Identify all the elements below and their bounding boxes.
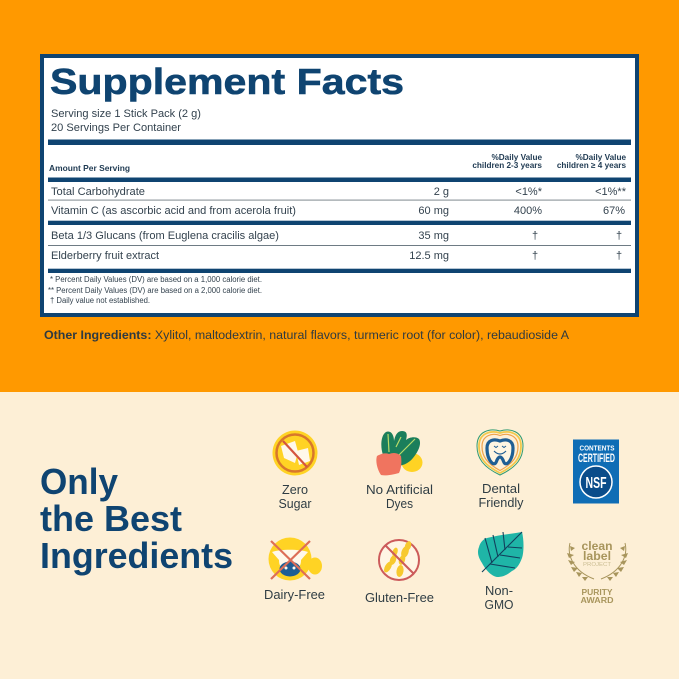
label: no artificial dyes: Dyes <box>386 496 413 511</box>
label: dental friendly: Friendly <box>478 495 524 510</box>
row: elderberry: † <box>532 250 538 262</box>
label: dental friendly: Dental <box>482 481 520 496</box>
icon: clean label project purity award: PURITY <box>582 588 613 597</box>
footnotes: * Percent Daily Values (DV) are based on a 1,000 calorie diet. <box>50 275 262 284</box>
row: beta glucans: Beta 1/3 Glucans (from Euglena cracilis algae) <box>51 230 279 242</box>
table header: children 2-3 years <box>472 161 542 170</box>
row: elderberry: Elderberry fruit extract <box>51 250 159 262</box>
row: vitamin C: 67% <box>603 205 625 217</box>
table header: %Daily Value <box>575 153 626 162</box>
icon: clean label project purity award <box>567 541 628 605</box>
row: total carbohydrate: Total Carbohydrate <box>51 186 145 198</box>
label: zero sugar: Sugar <box>278 496 312 511</box>
icon: clean label project purity award: clean <box>582 541 612 553</box>
label: non-GMO: Non- <box>485 583 513 598</box>
other ingredients: Other Ingredients: Xylitol, maltodextrin, natural flavors, turmeric root (for color), rebaudioside A <box>44 328 570 342</box>
row: total carbohydrate: 2 g <box>434 186 449 198</box>
icon: NSF contents certified badge: CERTIFIED <box>578 453 615 465</box>
icon: zero sugar <box>272 430 318 476</box>
table header <box>49 153 626 173</box>
row: elderberry: † <box>616 250 622 262</box>
heading: Only the Best Ingredients <box>40 461 233 576</box>
icon: dairy-free <box>268 538 322 580</box>
footnotes: † Daily value not established. <box>50 296 150 305</box>
icon: NSF contents certified badge: NSF <box>586 475 607 492</box>
row: beta glucans: † <box>616 230 622 242</box>
row: total carbohydrate: <1%** <box>595 186 627 198</box>
icon: NSF contents certified badge <box>573 440 619 504</box>
icon: clean label project purity award: label <box>583 551 611 563</box>
table header: children ≥ 4 years <box>557 161 626 170</box>
row: vitamin C: 60 mg <box>418 205 449 217</box>
label: zero sugar <box>278 482 312 511</box>
heading: Supplement Facts: Supplement Facts <box>50 61 404 102</box>
serving information: Serving size 1 Stick Pack (2 g) <box>51 108 201 120</box>
row: vitamin C: Vitamin C (as ascorbic acid and from acerola fruit) <box>51 205 296 217</box>
row: total carbohydrate <box>51 186 627 198</box>
label: gluten-free: Gluten-Free <box>365 590 434 605</box>
serving information <box>51 108 201 134</box>
heading: Only the Best Ingredients: Only <box>40 461 118 502</box>
table header: %Daily Value <box>491 153 542 162</box>
heading: Only the Best Ingredients: the Best <box>40 498 182 539</box>
panel: supplement facts label <box>42 56 637 315</box>
label: zero sugar: Zero <box>282 482 308 497</box>
orange top section background <box>0 0 679 392</box>
row: elderberry <box>51 250 622 262</box>
icon: clean label project purity award: PROJECT <box>583 562 611 568</box>
row: beta glucans: † <box>532 230 538 242</box>
label: non-GMO: GMO <box>484 597 514 612</box>
label: dairy-free: Dairy-Free <box>264 587 325 602</box>
icon: dental friendly <box>477 430 523 475</box>
icon: non-GMO leaf <box>478 532 524 577</box>
row: beta glucans: 35 mg <box>418 230 449 242</box>
icon: no artificial dyes <box>376 431 422 475</box>
label: no artificial dyes: No Artificial <box>366 482 433 497</box>
footnotes <box>48 275 262 305</box>
row: elderberry: 12.5 mg <box>409 250 449 262</box>
label: dental friendly <box>478 481 524 510</box>
heading: Only the Best Ingredients: Ingredients <box>40 535 233 576</box>
row: beta glucans <box>51 230 622 242</box>
icon: clean label project purity award: AWARD <box>580 596 614 605</box>
table header: Amount Per Serving <box>49 164 130 173</box>
icon: NSF contents certified badge: CONTENTS <box>580 446 615 452</box>
icon: gluten-free <box>379 540 419 580</box>
label: no artificial dyes <box>366 482 433 511</box>
serving information: 20 Servings Per Container <box>51 122 181 134</box>
label: non-GMO <box>484 583 514 612</box>
row: total carbohydrate: <1%* <box>515 186 543 198</box>
row: vitamin C <box>51 205 625 217</box>
footnotes: ** Percent Daily Values (DV) are based on a 2,000 calorie diet. <box>48 286 262 295</box>
row: vitamin C: 400% <box>514 205 542 217</box>
